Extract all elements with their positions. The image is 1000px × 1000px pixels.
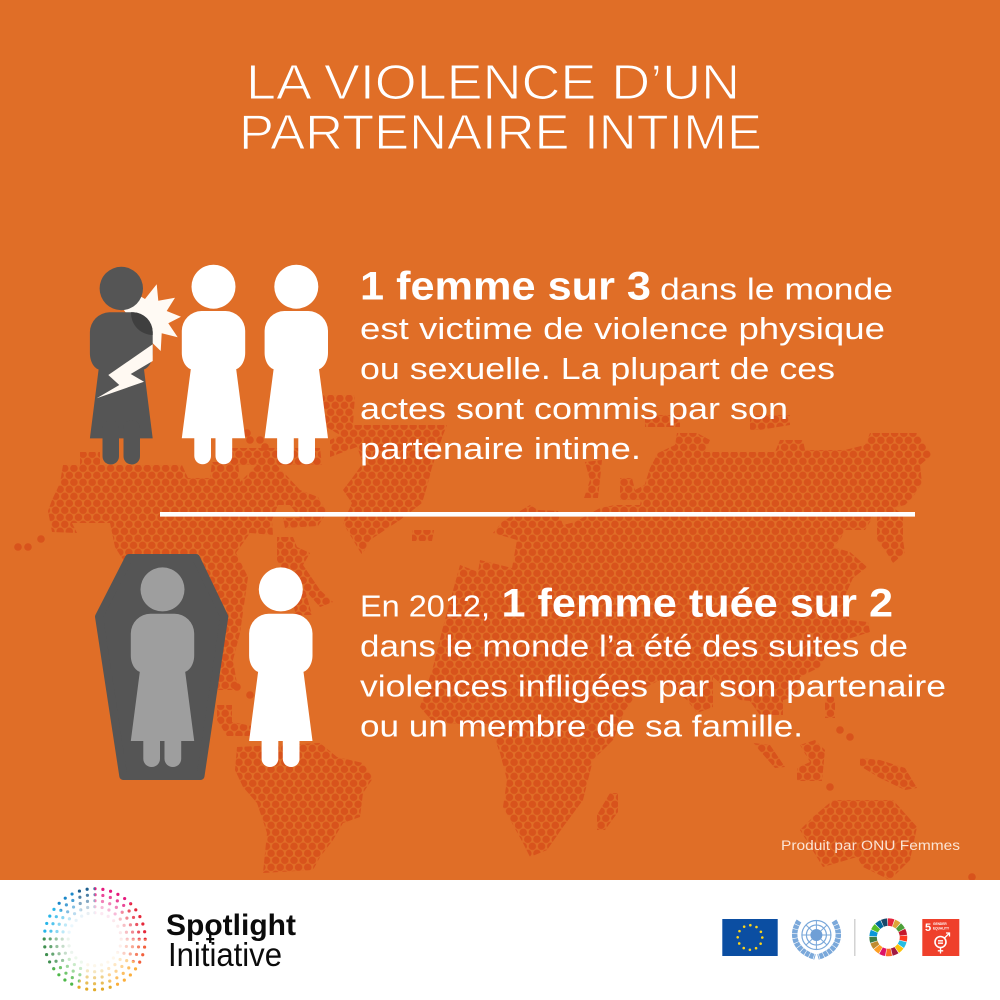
logo: spotlight dotted ring: [44, 889, 145, 990]
logo: EU flag: [722, 919, 778, 956]
icon: impact burst: [123, 284, 181, 351]
title: LA VIOLENCE D’UN: [246, 56, 740, 110]
text: one woman in three: [360, 264, 893, 466]
logo: spotlight wordmark: [166, 909, 296, 973]
pictogram: coffin and woman: [99, 558, 312, 776]
logo: SDG 5 gender equality: EQUALITY: [933, 926, 950, 930]
icon: standing woman: [249, 567, 312, 767]
text: one murdered woman in two: En 2012,: [360, 589, 490, 624]
title: PARTENAIRE INTIME: [239, 106, 762, 160]
text: one woman in three: partenaire intime.: [360, 431, 641, 466]
footer band: [0, 880, 1000, 1000]
logo: SDG 5 gender equality: GENDER: [933, 922, 947, 926]
icon: coffin: [99, 558, 224, 776]
divider: [854, 919, 855, 956]
pictogram: three women, one victim of violence: [90, 265, 328, 464]
logo: spotlight wordmark: Initiative: [168, 936, 282, 973]
logo: SDG 5 gender equality: 5: [925, 922, 931, 934]
logo: spotlight wordmark: Spotlight: [166, 909, 296, 942]
text: one murdered woman in two: [360, 582, 946, 744]
text: one woman in three: dans le monde: [660, 272, 893, 306]
text: one woman in three: actes sont commis par son: [360, 391, 788, 426]
divider line: [160, 512, 915, 517]
text: one murdered woman in two: 1 femme tuée sur 2: [502, 582, 893, 626]
text: one woman in three: 1 femme sur 3: [360, 264, 651, 308]
logo: SDG 5 gender equality: [922, 919, 959, 956]
icon: woman in coffin: [131, 567, 194, 767]
text: one woman in three: ou sexuelle. La plupart de ces: [360, 351, 835, 386]
dotted world map: [0, 390, 1000, 881]
text: one murdered woman in two: ou un membre de sa famille.: [360, 709, 803, 744]
icon: struck woman: [90, 267, 153, 464]
text: one woman in three: est victime de violence physique: [360, 311, 885, 346]
logo: UN emblem: [795, 920, 838, 957]
logo: SDG wheel: [873, 922, 904, 952]
icon: woman 2: [182, 265, 245, 464]
text: one murdered woman in two: violences infligées par son partenaire: [360, 669, 946, 704]
credit: Produit par ONU Femmes: [781, 838, 960, 853]
title: [239, 56, 762, 160]
icon: woman 3: [265, 265, 328, 464]
text: one murdered woman in two: dans le monde l’a été des suites de: [360, 629, 908, 664]
